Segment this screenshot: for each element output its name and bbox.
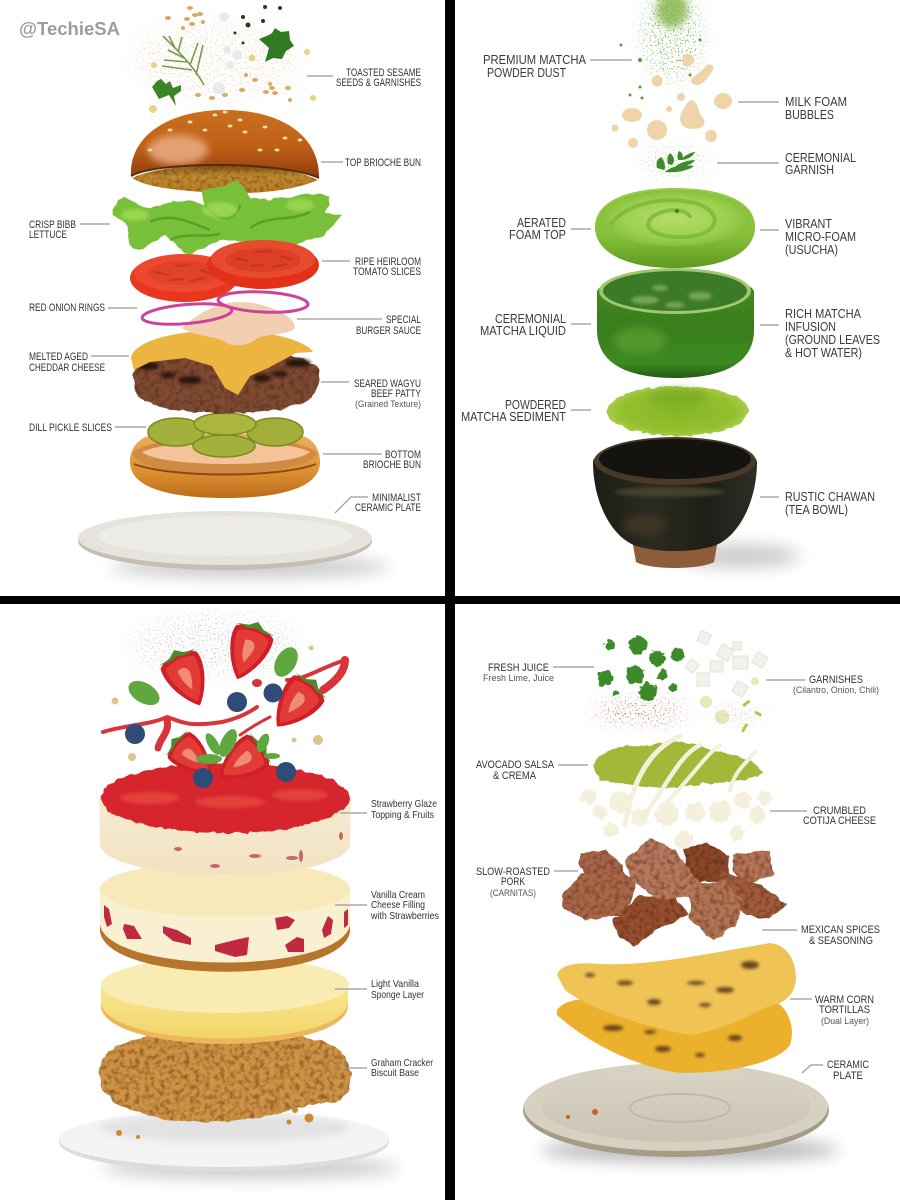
label: fresh juice: FRESH JUICE xyxy=(488,662,549,674)
strawberry glaze topping xyxy=(99,763,351,875)
matcha powder dust xyxy=(620,0,702,100)
label: sauce xyxy=(297,314,421,337)
rustic chawan xyxy=(593,437,800,568)
label: toasted sesame: TOASTED SESAME xyxy=(346,67,421,79)
label: powdered matcha sediment xyxy=(461,398,591,424)
label: strawberry glaze: Strawberry Glaze xyxy=(371,798,437,810)
label: cotija xyxy=(770,805,876,827)
label: vibrant micro-foam xyxy=(760,217,856,257)
label: bottom bun xyxy=(323,449,421,471)
label: cotija: COTIJA CHEESE xyxy=(803,815,876,827)
bottom brioche bun xyxy=(130,434,320,498)
label: spices: MEXICAN SPICES xyxy=(801,924,880,936)
label: cheese: MELTED AGED xyxy=(29,351,88,363)
seared wagyu beef patty xyxy=(133,352,319,413)
label: rustic chawan xyxy=(760,490,875,517)
plate xyxy=(59,1107,400,1178)
ceremonial matcha liquid in glass xyxy=(597,268,754,378)
label: pork xyxy=(476,866,578,898)
label: ceramic plate xyxy=(802,1059,869,1082)
label: ceremonial garnish xyxy=(717,151,856,177)
milk foam bubbles xyxy=(612,54,732,148)
label: milk foam bubbles: BUBBLES xyxy=(785,108,834,122)
label: rich matcha infusion: INFUSION xyxy=(785,320,836,334)
label: vanilla cream cheese: Vanilla Cream xyxy=(371,889,425,901)
label: pork: (CARNITAS) xyxy=(490,888,536,898)
label: lettuce: CRISP BIBB xyxy=(29,219,76,231)
label: tortillas: TORTILLAS xyxy=(819,1004,870,1016)
label: top brioche bun: TOP BRIOCHE BUN xyxy=(345,157,421,169)
label: graham cracker: Biscuit Base xyxy=(371,1067,419,1079)
label: fresh juice: Fresh Lime, Juice xyxy=(483,673,554,683)
label: tomato: RIPE HEIRLOOM xyxy=(355,256,421,268)
ceremonial garnish xyxy=(641,148,709,176)
melted aged cheddar cheese xyxy=(131,330,313,395)
label: fresh juice xyxy=(483,662,594,683)
label: top brioche bun xyxy=(321,157,421,169)
label: aerated foam top: FOAM TOP xyxy=(509,228,566,242)
avocado salsa and crema xyxy=(593,736,762,825)
label: milk foam bubbles xyxy=(738,95,847,122)
label: rustic chawan: (TEA BOWL) xyxy=(785,503,848,517)
label: powdered matcha sediment: POWDERED xyxy=(505,398,566,412)
left tomato slice xyxy=(130,254,238,302)
label: lettuce: LETTUCE xyxy=(29,229,67,241)
panel: matcha xyxy=(455,0,900,596)
label: graham cracker: Graham Cracker xyxy=(371,1057,433,1069)
label: vibrant micro-foam: (USUCHA) xyxy=(785,243,838,257)
burger garnishes xyxy=(130,5,316,113)
special burger sauce xyxy=(182,302,295,345)
label: powdered matcha sediment: MATCHA SEDIMENT xyxy=(461,410,566,424)
crumbled cotija cheese xyxy=(580,789,772,849)
label: ceremonial matcha liquid: MATCHA LIQUID xyxy=(480,324,566,338)
label: strawberry glaze: Topping & Fruits xyxy=(371,809,434,821)
label: bottom bun: BOTTOM xyxy=(385,449,421,461)
label: premium matcha powder dust xyxy=(483,53,632,80)
label: ceremonial garnish: GARNISH xyxy=(785,163,834,177)
warm corn tortillas xyxy=(557,943,796,1073)
label: tortillas xyxy=(790,994,874,1026)
label: lettuce xyxy=(29,219,110,241)
label: plate xyxy=(335,492,421,514)
top brioche bun xyxy=(131,110,319,193)
label: cheese xyxy=(29,351,129,374)
label: onion: RED ONION RINGS xyxy=(29,302,105,314)
label: rich matcha infusion xyxy=(760,307,880,360)
label: cotija: CRUMBLED xyxy=(813,805,866,817)
label: rich matcha infusion: RICH MATCHA xyxy=(785,307,862,321)
label: tomato: TOMATO SLICES xyxy=(353,266,421,278)
crisp bibb lettuce xyxy=(112,181,342,256)
label: sponge: Light Vanilla xyxy=(371,978,419,990)
label: rustic chawan: RUSTIC CHAWAN xyxy=(785,490,875,504)
panel: carnitas tacos xyxy=(455,604,900,1200)
label: garnishes: (Cilantro, Onion, Chili) xyxy=(793,685,879,695)
powdered sugar dust xyxy=(130,613,300,677)
label: plate: CERAMIC PLATE xyxy=(355,502,421,514)
label: graham cracker xyxy=(342,1057,433,1079)
label: avocado salsa: & CREMA xyxy=(493,770,537,782)
label: ceramic plate: CERAMIC xyxy=(827,1059,869,1071)
label: strawberry glaze xyxy=(340,798,437,821)
label: spices xyxy=(762,924,880,947)
slow-roasted pork xyxy=(562,838,788,948)
label: milk foam bubbles: MILK FOAM xyxy=(785,95,847,109)
panel: burger xyxy=(0,0,445,596)
label: aerated foam top xyxy=(509,216,591,242)
label: patty xyxy=(321,378,422,409)
label: aerated foam top: AERATED xyxy=(517,216,566,230)
label: pickles: DILL PICKLE SLICES xyxy=(29,422,112,434)
label: toasted sesame xyxy=(307,67,421,89)
label: vibrant micro-foam: VIBRANT xyxy=(785,217,832,231)
label: patty: BEEF PATTY xyxy=(371,388,422,400)
label: rich matcha infusion: (GROUND LEAVES xyxy=(785,333,880,347)
label: spices: & SEASONING xyxy=(809,935,873,947)
ceramic plate xyxy=(523,1063,840,1162)
ceramic plate xyxy=(78,511,390,577)
watermark: @TechieSA xyxy=(19,19,120,39)
label: premium matcha powder dust: PREMIUM MATCHA xyxy=(483,53,587,67)
cilantro, onion and spice garnishes xyxy=(592,630,768,732)
label: vibrant micro-foam: MICRO-FOAM xyxy=(785,230,856,244)
panel: cheesecake xyxy=(0,604,445,1200)
label: toasted sesame: SEEDS & GARNISHES xyxy=(336,77,421,89)
label: ceramic plate: PLATE xyxy=(833,1070,863,1082)
label: tortillas: (Dual Layer) xyxy=(821,1016,869,1026)
red onion rings xyxy=(141,290,308,327)
label: vanilla cream cheese xyxy=(335,889,439,922)
vanilla cream cheese filling xyxy=(100,861,350,972)
label: ceremonial matcha liquid xyxy=(480,312,591,338)
label: sponge xyxy=(335,978,424,1001)
graham cracker biscuit base xyxy=(100,1030,350,1122)
label: pork: SLOW-ROASTED xyxy=(476,866,550,878)
label: tomato xyxy=(322,256,421,278)
label: rich matcha infusion: & HOT WATER) xyxy=(785,346,862,360)
label: patty: SEARED WAGYU xyxy=(354,378,421,390)
label: tortillas: WARM CORN xyxy=(815,994,874,1006)
label: bottom bun: BRIOCHE BUN xyxy=(363,459,421,471)
aerated foam top xyxy=(595,188,755,268)
label: garnishes: GARNISHES xyxy=(809,674,863,686)
label: cheese: CHEDDAR CHEESE xyxy=(29,362,105,374)
label: sauce: SPECIAL xyxy=(386,314,421,326)
label: ceremonial garnish: CEREMONIAL xyxy=(785,151,856,165)
label: avocado salsa: AVOCADO SALSA xyxy=(476,759,555,771)
label: sauce: BURGER SAUCE xyxy=(356,325,421,337)
label: vanilla cream cheese: Cheese Filling xyxy=(371,899,425,911)
label: premium matcha powder dust: POWDER DUST xyxy=(487,66,566,80)
label: plate: MINIMALIST xyxy=(372,492,421,504)
label: avocado salsa xyxy=(476,759,588,782)
label: sponge: Sponge Layer xyxy=(371,989,424,1001)
fruits, mint and sauce xyxy=(103,615,345,793)
pickle slices xyxy=(148,413,303,457)
powdered matcha sediment xyxy=(607,386,749,436)
label: vanilla cream cheese: with Strawberries xyxy=(370,910,439,922)
light vanilla sponge layer xyxy=(101,957,349,1044)
label: pork: PORK xyxy=(501,876,525,888)
label: patty: (Grained Texture) xyxy=(355,399,421,409)
label: ceremonial matcha liquid: CEREMONIAL xyxy=(495,312,566,326)
right tomato slice xyxy=(207,240,319,289)
label: garnishes xyxy=(766,674,879,695)
